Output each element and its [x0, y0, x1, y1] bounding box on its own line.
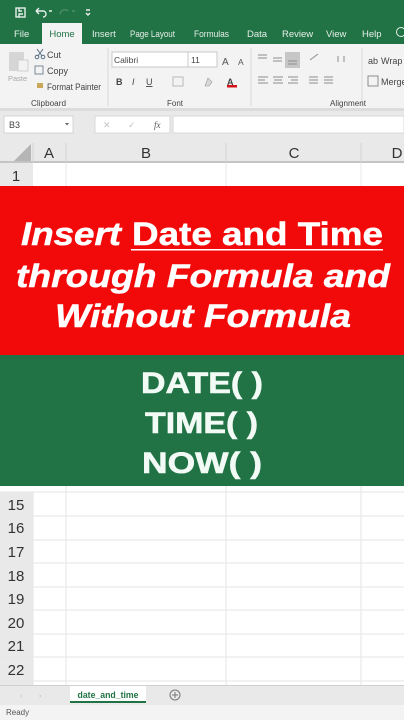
icon: format painter	[37, 83, 43, 88]
alignment group: Alignment	[330, 99, 367, 108]
active tab: Home	[42, 23, 82, 44]
title: through Formula and	[16, 258, 392, 294]
title	[16, 216, 392, 334]
clipboard group: Copy	[47, 66, 69, 76]
font size box	[188, 52, 217, 67]
alignment group: ab	[368, 56, 378, 66]
font group: 11	[191, 55, 200, 65]
sheet tab bar	[0, 685, 404, 705]
ribbon tab labels: View	[326, 29, 347, 40]
spreadsheet rows 15 to 22: 15	[8, 497, 24, 514]
spreadsheet rows 15 to 22: 20	[8, 615, 24, 632]
ribbon tab labels: Page Layout	[130, 29, 175, 40]
function names: TIME( )	[145, 407, 258, 440]
status bar: Ready	[6, 708, 29, 717]
column headers: A	[44, 145, 54, 162]
clipboard group: Paste	[8, 74, 27, 83]
font group: A	[222, 57, 229, 68]
ribbon panel	[0, 44, 404, 111]
formula bar: ✕	[103, 120, 111, 130]
ribbon tab labels: Data	[247, 29, 268, 40]
ribbon tab labels	[14, 29, 382, 40]
sheet tab bar: ‹	[20, 693, 23, 700]
ribbon tab labels: Insert	[92, 29, 116, 40]
spreadsheet rows 15 to 22: 22	[8, 662, 24, 679]
formula bar: B3	[9, 120, 20, 130]
icon: quick access toolbar	[16, 8, 90, 17]
function names: NOW( )	[142, 447, 262, 480]
clipboard group: Cut	[47, 50, 62, 60]
title: Date and Time	[132, 216, 383, 252]
column headers: C	[289, 145, 300, 162]
clipboard group: Clipboard	[31, 99, 66, 108]
active sheet tab	[70, 686, 146, 703]
alignment group	[258, 52, 404, 108]
font group: Calibri	[114, 55, 138, 65]
font group: A	[227, 77, 234, 87]
font group: I	[132, 77, 135, 87]
column headers: B	[141, 145, 151, 162]
formula bar: fx	[154, 120, 161, 130]
formula input	[173, 116, 404, 133]
status bar	[0, 705, 404, 720]
spreadsheet row 1	[0, 163, 361, 186]
icon: cut	[35, 49, 45, 59]
font group: U	[146, 77, 152, 87]
title: Insert	[21, 216, 123, 252]
font group	[112, 52, 244, 108]
spreadsheet rows 15 to 22: 17	[8, 544, 24, 561]
spreadsheet rows 15 to 22: 16	[8, 520, 24, 537]
column headers: D	[392, 145, 403, 162]
spreadsheet row 1: 1	[12, 168, 20, 185]
active sheet tab: date_and_time	[78, 690, 138, 701]
icon: copy	[35, 66, 43, 74]
font group: Font	[167, 99, 184, 108]
column headers	[0, 141, 404, 163]
function names: DATE( )	[141, 367, 263, 400]
function buttons	[95, 116, 170, 133]
ribbon tab labels: Help	[362, 29, 382, 40]
green functions banner	[0, 355, 404, 486]
spreadsheet rows 15 to 22	[0, 486, 404, 685]
spreadsheet rows 15 to 22: 18	[8, 568, 24, 585]
formula bar	[0, 111, 404, 141]
icon: add sheet	[170, 690, 180, 700]
font group: A	[238, 57, 244, 67]
ribbon tab labels: Formulas	[194, 29, 229, 40]
function names	[141, 367, 263, 480]
sheet tab bar: ›	[39, 693, 42, 700]
icon: tell me bulb	[396, 28, 404, 36]
clipboard group: Format Painter	[47, 82, 101, 92]
font group: B	[116, 77, 123, 87]
red title banner	[0, 186, 404, 355]
font name box	[112, 52, 188, 67]
spreadsheet rows 15 to 22: 21	[8, 638, 24, 655]
title bar and ribbon tabs	[0, 0, 404, 44]
title: Without Formula	[55, 298, 351, 334]
icon: paste	[9, 52, 28, 71]
ribbon tab labels: Review	[282, 29, 313, 40]
active tab: Home: Home	[49, 29, 75, 40]
clipboard group	[8, 49, 101, 108]
formula bar: ✓	[128, 120, 136, 130]
spreadsheet rows 15 to 22: 19	[8, 591, 24, 608]
ribbon tab labels: File	[14, 29, 29, 40]
name box	[4, 116, 73, 133]
